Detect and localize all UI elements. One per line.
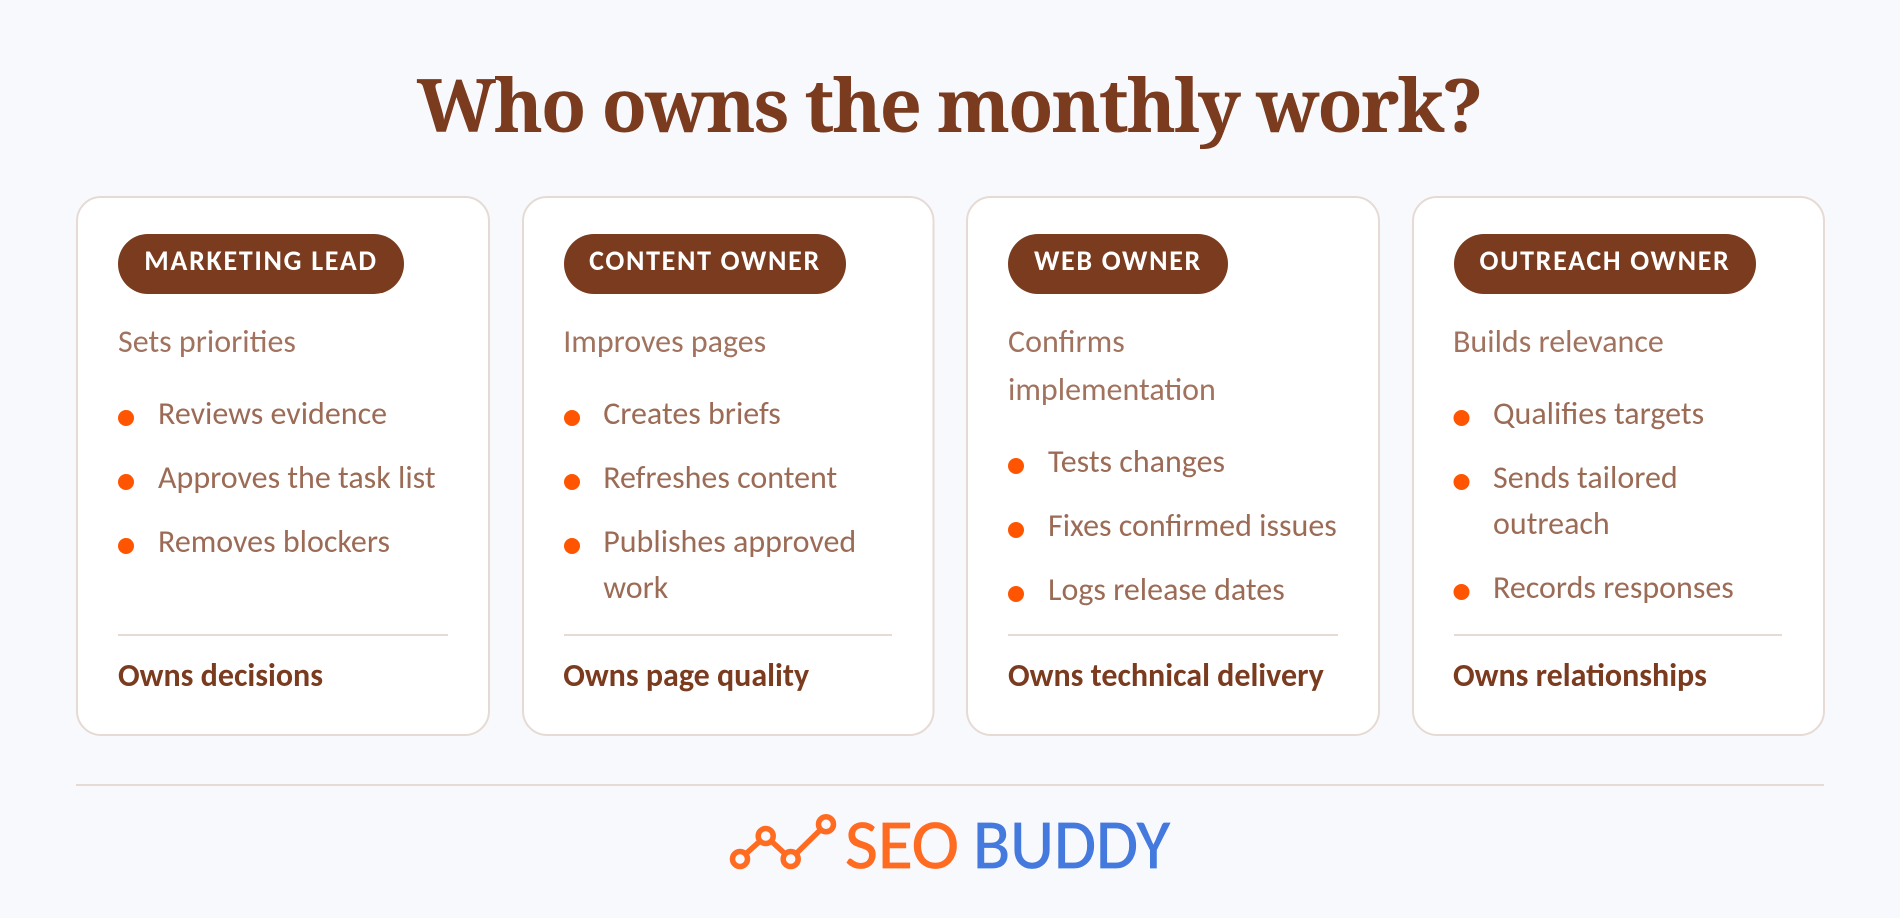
panel: outreach owner <box>1413 197 1824 735</box>
role summary: Confirms <box>1008 322 1125 361</box>
role pill: marketing lead <box>118 234 404 294</box>
task list: Removes blockers <box>158 522 390 561</box>
role summary: Builds relevance <box>1453 322 1664 361</box>
role pill: marketing lead: MARKETING LEAD <box>144 243 378 278</box>
icon: rising line chart <box>732 817 834 866</box>
ownership statement: Owns decisions <box>118 656 323 695</box>
task list: work <box>603 568 669 607</box>
task list: Reviews evidence <box>158 394 387 433</box>
role pill: outreach owner <box>1454 234 1756 294</box>
logo: SEO Buddy <box>732 801 1171 887</box>
role summary: Sets priorities <box>118 322 296 361</box>
role pill: web owner <box>1008 234 1228 294</box>
role pill: web owner: WEB OWNER <box>1034 243 1202 278</box>
task list: Fixes confirmed issues <box>1048 506 1337 545</box>
panel: content owner <box>523 197 934 735</box>
task list: Creates briefs <box>603 394 781 433</box>
task list: Qualifies targets <box>1493 394 1704 433</box>
ownership statement: Owns page quality <box>563 656 809 695</box>
role summary <box>1008 322 1216 409</box>
task list: Publishes approved <box>603 522 856 561</box>
role summary: implementation <box>1008 370 1216 409</box>
role pill: content owner: CONTENT OWNER <box>589 243 821 278</box>
wordmark: BUDDY <box>973 801 1171 887</box>
task list: Refreshes content <box>603 458 838 497</box>
panel: marketing lead <box>77 197 489 735</box>
task list: Sends tailored <box>1493 458 1678 497</box>
task list <box>564 394 856 607</box>
role pill: content owner <box>564 234 846 294</box>
task list <box>1454 394 1734 607</box>
panel: web owner <box>967 197 1379 735</box>
task list <box>118 394 436 561</box>
task list <box>1008 442 1337 609</box>
task list: Tests changes <box>1048 442 1225 481</box>
ownership statement: Owns technical delivery <box>1008 656 1324 695</box>
role pill: outreach owner: OUTREACH OWNER <box>1480 243 1730 278</box>
role summary: Improves pages <box>563 322 766 361</box>
wordmark <box>845 801 1171 887</box>
task list: Logs release dates <box>1048 570 1285 609</box>
task list: Approves the task list <box>158 458 436 497</box>
ownership statement: Owns relationships <box>1453 656 1707 695</box>
task list: outreach <box>1493 504 1610 543</box>
title: Who owns the monthly work? <box>417 53 1481 154</box>
task list: Records responses <box>1493 568 1734 607</box>
wordmark: SEO <box>845 801 959 887</box>
